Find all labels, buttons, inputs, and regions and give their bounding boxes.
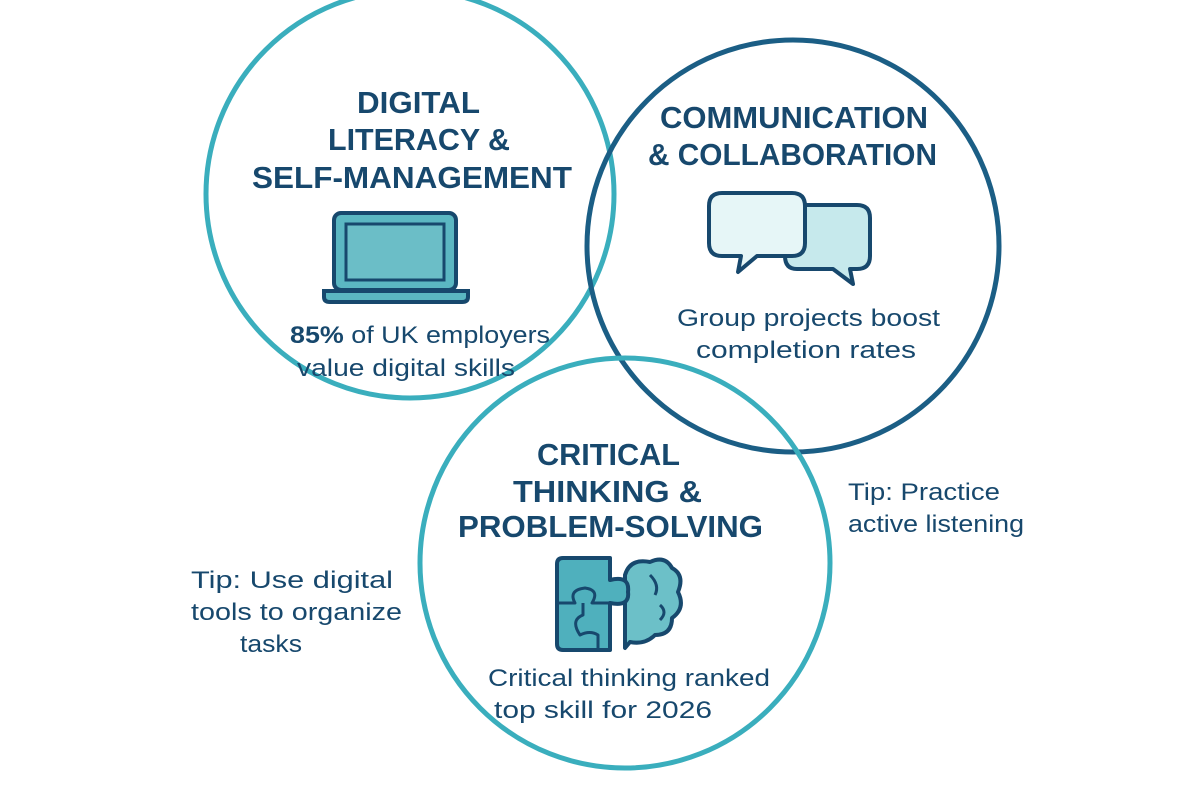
text: critical stat: top skill for 2026 — [494, 697, 712, 724]
icon: speech bubbles — [709, 193, 870, 284]
heading: critical thinking: PROBLEM-SOLVING — [458, 509, 763, 544]
heading: critical thinking: THINKING & — [513, 474, 702, 509]
tip: left: Tip: Use digital — [191, 567, 393, 594]
icon: laptop — [324, 213, 468, 302]
text: digital stat: 85% of UK employers — [290, 322, 550, 349]
tip: right: active listening — [848, 511, 1024, 538]
heading: digital literacy: SELF-MANAGEMENT — [252, 160, 572, 195]
text: communication stat: Group projects boost — [677, 305, 940, 332]
heading: digital literacy: DIGITAL — [357, 85, 480, 120]
tip: right: Tip: Practice — [848, 479, 1000, 506]
heading: digital literacy — [252, 85, 572, 195]
circle: communication — [587, 40, 999, 452]
tip: left: tools to organize — [191, 599, 402, 626]
heading: communication: & COLLABORATION — [648, 137, 937, 172]
heading: critical thinking: CRITICAL — [537, 437, 680, 472]
text: critical stat — [488, 665, 770, 724]
heading: communication: COMMUNICATION — [660, 100, 928, 135]
text: communication stat — [677, 305, 940, 364]
heading: communication — [648, 100, 937, 172]
text: digital stat — [290, 322, 550, 382]
icon: puzzle and brain — [557, 558, 681, 650]
circle: digital literacy — [206, 0, 614, 398]
circle: critical thinking — [420, 358, 830, 768]
tip: left — [191, 567, 402, 658]
tip: left: tasks — [240, 631, 302, 658]
heading: critical thinking — [458, 437, 763, 544]
text: digital stat: value digital skills — [297, 355, 515, 382]
heading: digital literacy: LITERACY & — [328, 122, 510, 157]
tip: right — [848, 479, 1024, 538]
text: communication stat: completion rates — [696, 337, 916, 364]
text: critical stat: Critical thinking ranked — [488, 665, 770, 692]
